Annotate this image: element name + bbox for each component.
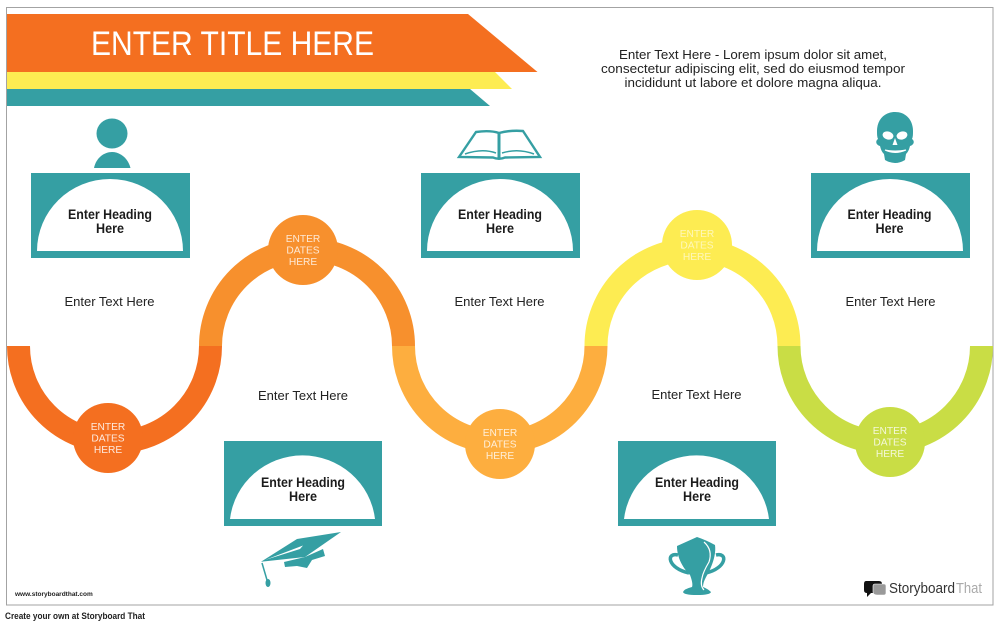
heading card 2: Enter Heading xyxy=(458,206,542,222)
segment 4: HERE xyxy=(683,252,711,263)
intro text: Enter Text Here - Lorem ipsum dolor sit amet, xyxy=(619,47,887,62)
website label: www.storyboardthat.com xyxy=(14,591,93,598)
segment 3: ENTER xyxy=(483,428,517,439)
icon: open book xyxy=(459,131,540,159)
segment 2: DATES xyxy=(286,246,320,256)
heading card 3 xyxy=(811,173,970,258)
heading card 1 xyxy=(31,173,190,258)
heading card 4: Here xyxy=(289,488,317,504)
segment 3: DATES xyxy=(483,440,517,450)
title banner xyxy=(7,14,538,106)
body text labels: Enter Text Here xyxy=(454,294,545,309)
footer credit: Create your own at Storyboard That xyxy=(5,611,145,621)
body text labels: Enter Text Here xyxy=(651,387,742,402)
icon: trophy xyxy=(670,537,724,595)
heading card 2 xyxy=(421,173,580,258)
intro text xyxy=(601,47,906,90)
heading card 3: Here xyxy=(876,220,904,236)
heading card 5: Enter Heading xyxy=(655,474,739,490)
timeline wave xyxy=(18,210,982,479)
icon: skull xyxy=(876,112,914,163)
heading card 1: Enter Heading xyxy=(68,206,152,222)
storyboard that logo: Storyboard xyxy=(889,581,955,597)
heading card 5 xyxy=(618,441,776,526)
body text labels: Enter Text Here xyxy=(845,294,936,309)
storyboard that logo: That xyxy=(956,581,982,597)
icon: graduation cap xyxy=(261,532,341,587)
segment 5: HERE xyxy=(876,449,904,460)
segment 2 xyxy=(210,215,404,346)
heading card 2: Here xyxy=(486,220,514,236)
segment 4: DATES xyxy=(680,240,714,252)
segment 5: DATES xyxy=(873,438,907,448)
body text labels xyxy=(64,294,936,403)
title banner: ENTER TITLE HERE xyxy=(91,25,374,63)
segment 1 xyxy=(18,346,210,473)
segment 5: ENTER xyxy=(873,426,907,437)
segment 3 xyxy=(404,346,596,479)
intro text: incididunt ut labore et dolore magna aliqua. xyxy=(624,75,882,90)
heading card 3: Enter Heading xyxy=(848,206,932,222)
body text labels: Enter Text Here xyxy=(258,388,348,403)
segment 4: ENTER xyxy=(680,229,714,240)
icon: person xyxy=(94,118,130,168)
segment 3: HERE xyxy=(486,451,514,462)
segment 1: HERE xyxy=(94,445,122,456)
heading card 1: Here xyxy=(96,220,124,236)
storyboard that logo xyxy=(864,581,982,597)
segment 1: DATES xyxy=(91,434,125,444)
heading card 4 xyxy=(224,441,382,526)
segment 5 xyxy=(789,346,982,477)
intro text: consectetur adipiscing elit, sed do eiusmod tempor xyxy=(601,61,906,76)
segment 2: HERE xyxy=(289,257,317,268)
segment 4 xyxy=(596,210,789,346)
segment 1: ENTER xyxy=(91,422,125,433)
segment 2: ENTER xyxy=(286,234,320,245)
heading card 4: Enter Heading xyxy=(261,474,345,490)
body text labels: Enter Text Here xyxy=(64,294,155,309)
heading card 5: Here xyxy=(683,488,711,504)
